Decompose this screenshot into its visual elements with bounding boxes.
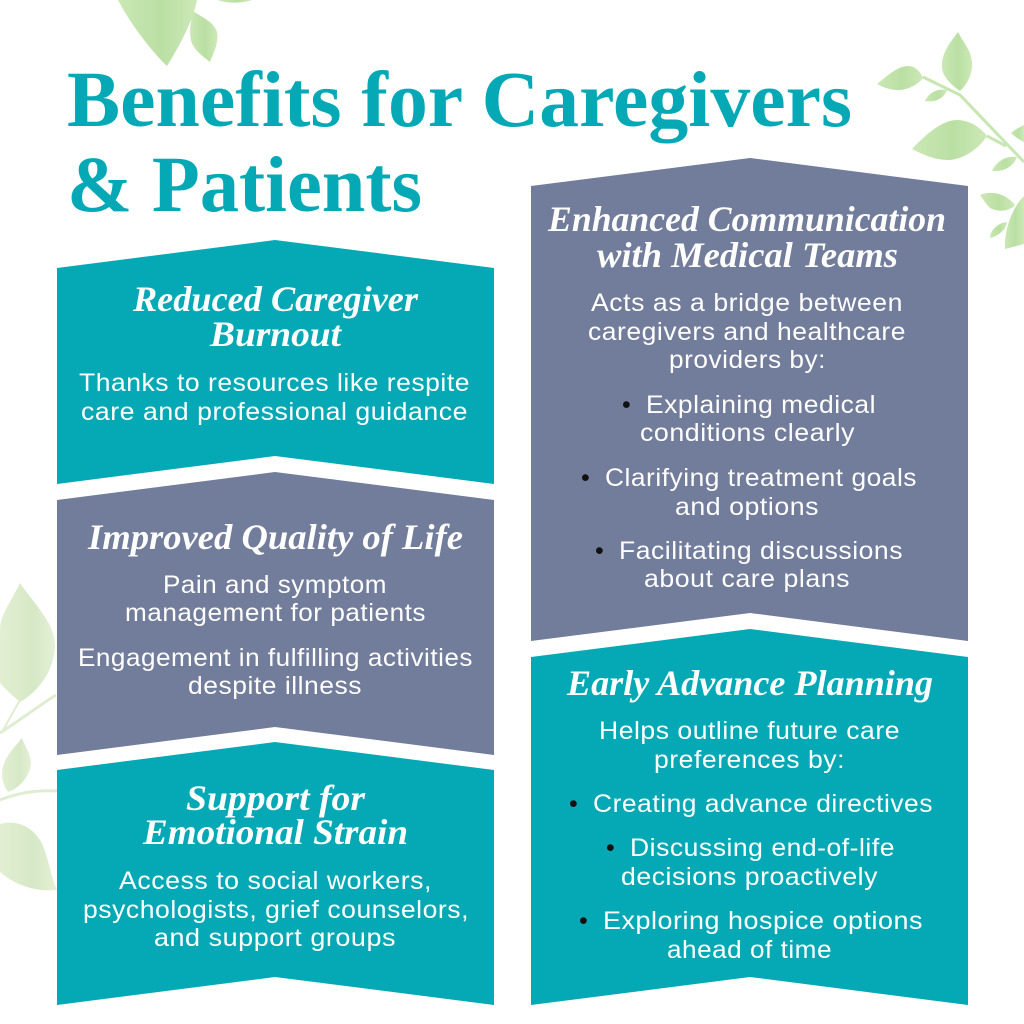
bullet: exploring hospice options (579, 907, 923, 964)
bullet: facilitating discussions: • (595, 537, 604, 565)
text: quality of life description: management for patients (125, 599, 426, 627)
bullet: explaining medical conditions: • (622, 391, 631, 419)
panel: support for emotional strain (57, 742, 494, 1005)
bullet: clarifying treatment goals: and options (675, 493, 819, 521)
bullet: exploring hospice options: Exploring hospice options (603, 907, 923, 935)
text: communication intro: caregivers and healthcare (588, 318, 906, 346)
bullet: explaining medical conditions: conditions clearly (640, 419, 855, 447)
text: communication intro: providers by: (669, 346, 826, 374)
leaves: top centre (118, 0, 252, 66)
bullet: discussing end-of-life decisions: Discussing end-of-life (630, 834, 895, 862)
heading: enhanced communication (547, 199, 946, 275)
text: quality of life description: despite illness (188, 672, 362, 700)
bullet: exploring hospice options: • (579, 907, 588, 935)
bullet: explaining medical conditions (622, 391, 876, 447)
heading: reduced caregiver burnout: Reduced Caregiver (132, 279, 419, 319)
text: emotional strain description: and support groups (154, 924, 396, 952)
bullet: discussing end-of-life decisions (606, 834, 895, 891)
bullet: facilitating discussions: Facilitating discussions (619, 537, 903, 565)
heading: reduced caregiver burnout (132, 279, 419, 354)
heading: enhanced communication: with Medical Teams (597, 235, 898, 275)
title (67, 57, 852, 229)
text: emotional strain description: psychologists, grief counselors, (83, 896, 469, 924)
title: Benefits for Caregivers (67, 57, 852, 144)
bullet: facilitating discussions: about care plans (644, 565, 850, 593)
heading: support for emotional strain: Support for (186, 778, 366, 818)
leaves: left sprig (0, 583, 57, 890)
heading: early advance planning: Early Advance Planning (566, 663, 933, 703)
text: advance planning intro (599, 717, 900, 774)
text: burnout description: care and professional guidance (81, 398, 468, 426)
bullet: creating advance directives: Creating advance directives (593, 790, 933, 818)
bullet: explaining medical conditions: Explaining medical (646, 391, 876, 419)
text: communication intro (588, 289, 906, 374)
bullet: facilitating discussions (595, 537, 903, 593)
text: advance planning intro: Helps outline future care (599, 717, 900, 745)
text: burnout description: Thanks to resources like respite (79, 369, 470, 397)
heading: improved quality of life: Improved Quality of Life (87, 517, 463, 557)
leaves: top right sprig (877, 32, 1024, 249)
text: quality of life description: Pain and symptom (163, 571, 387, 599)
bullet: discussing end-of-life decisions: • (606, 834, 615, 862)
heading: enhanced communication: Enhanced Communication (547, 199, 946, 239)
text: advance planning intro: preferences by: (654, 746, 845, 774)
bullet: discussing end-of-life decisions: decisions proactively (621, 863, 878, 891)
panel: early advance planning (531, 629, 968, 1005)
bullet: clarifying treatment goals: • (581, 464, 590, 492)
title: & Patients (67, 142, 422, 229)
bullet: clarifying treatment goals (581, 464, 917, 521)
panel: improved quality of life (57, 472, 494, 755)
heading: reduced caregiver burnout: Burnout (209, 314, 342, 354)
text: quality of life description (78, 571, 473, 700)
panel: enhanced communication with medical teams (531, 158, 968, 641)
heading: support for emotional strain: Emotional Strain (142, 812, 408, 852)
text: communication intro: Acts as a bridge between (591, 289, 903, 317)
bullet: exploring hospice options: ahead of time (667, 936, 832, 964)
text: emotional strain description: Access to social workers, (119, 867, 432, 895)
text: quality of life description: Engagement in fulfilling activities (78, 644, 473, 672)
bullet: creating advance directives: • (569, 790, 578, 818)
heading: support for emotional strain (142, 778, 408, 852)
panel: reduced caregiver burnout (57, 240, 494, 484)
text: burnout description (79, 369, 470, 426)
bullet: clarifying treatment goals: Clarifying treatment goals (605, 464, 917, 492)
text: emotional strain description (83, 867, 469, 952)
